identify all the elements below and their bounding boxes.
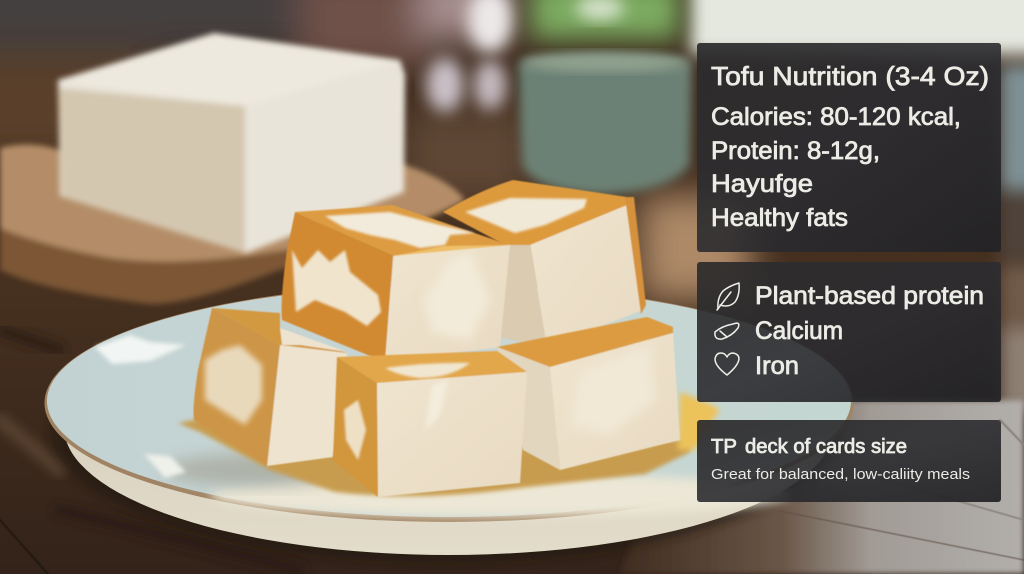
icon: heart (715, 353, 739, 375)
icon: leaf (717, 283, 739, 310)
tofu cube: front centre (333, 351, 527, 497)
serving size heading: deck of cards size (745, 436, 907, 458)
blurred bowl (518, 56, 692, 195)
tofu cube: lower right (497, 317, 680, 470)
plate glaze and shading (95, 335, 790, 517)
cutting board (0, 144, 465, 304)
blurred window and greenery (468, 0, 1024, 410)
serving size note: Great for balanced, low-caliity meals (711, 466, 970, 483)
label: calcium: Calcium (755, 317, 843, 345)
plate (44, 284, 854, 562)
panel: serving size tip (697, 420, 1001, 502)
sauce pool (178, 392, 720, 496)
right side table (620, 400, 1024, 574)
tofu cube: back right (443, 180, 646, 347)
icon: calcium capsule (715, 323, 739, 339)
label: plant-based protein: Plant-based protein (755, 282, 984, 310)
serving size heading: TP (711, 436, 737, 458)
nutrition list: Hayufge (711, 170, 813, 198)
nutrition list: Healthy fats (711, 204, 848, 232)
heading: Tofu Nutrition (3-4 Oz) (711, 61, 989, 91)
nutrition list (711, 103, 961, 232)
panel: nutrient benefits (697, 262, 1001, 402)
label: iron: Iron (755, 352, 799, 380)
blurred tofu block (58, 33, 405, 253)
left table grain (0, 330, 300, 574)
tofu cube: lower left (194, 308, 347, 466)
nutrition list: Calories: 80-120 kcal, (711, 103, 961, 131)
panel: tofu nutrition facts (697, 43, 1001, 252)
nutrition list: Protein: 8-12g, (711, 137, 880, 165)
tofu cube: upper centre (282, 205, 510, 362)
